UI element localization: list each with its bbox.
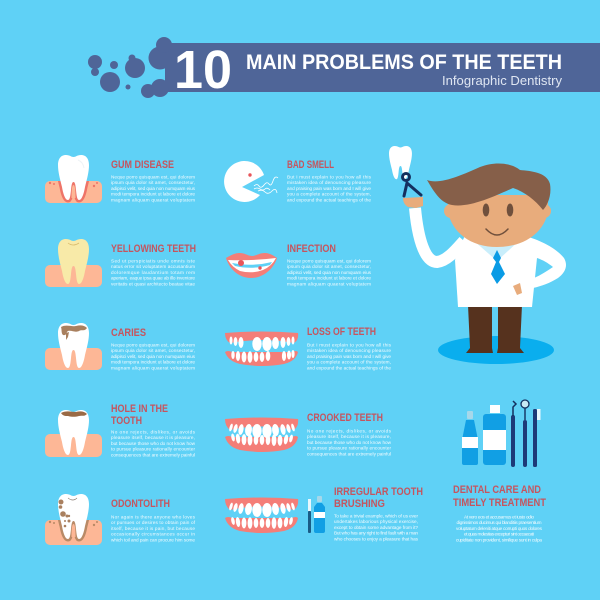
icon: toothbrush and paste <box>308 496 325 533</box>
icon: lips with infected teeth <box>226 253 277 278</box>
icon: tooth with inflamed gum <box>45 155 102 203</box>
text block: Sed ut perspiciatis unde omnis iste <box>111 258 195 264</box>
text block: which toil and pain can procure him some <box>111 537 195 542</box>
heading: GUM DISEASE <box>111 159 174 171</box>
text block: At vero eos et accusamus et iusto odio <box>464 514 534 520</box>
text block: you a complete account of the system, <box>307 360 391 365</box>
heading line 2: TIMELY TREATMENT <box>453 497 546 509</box>
right arm <box>520 236 566 292</box>
left arm <box>415 208 464 262</box>
text block: magnam aliquam quaerat voluptatem <box>111 365 195 370</box>
text block: dignissimos ducimus qui blanditiis praesentium <box>456 520 542 525</box>
text block: except to obtain some advantage from it? <box>334 525 418 530</box>
hand at hip <box>513 283 522 295</box>
text block: ipsum quia dolor sit amet, consectetur, <box>287 264 371 269</box>
panel: loss of teeth <box>225 326 392 370</box>
text block: No one rejects, dislikes, or avoids <box>307 428 392 434</box>
panel: yellowing teeth <box>45 239 196 287</box>
icon: toothpaste tube <box>462 411 478 465</box>
icon: yellow tooth <box>45 239 102 287</box>
text block: but because those who do not know how <box>307 440 392 445</box>
text block: ipsum quia dolor sit amet, consectetur, <box>111 348 195 353</box>
panel: gum disease <box>45 155 196 203</box>
collar <box>473 240 520 261</box>
text block: To take a trivial example, which of us ever <box>334 514 418 518</box>
text block: but because those who do not know how <box>111 441 196 446</box>
icon: dental mirror <box>521 400 529 467</box>
floor shadow <box>438 336 554 364</box>
text block <box>307 342 392 370</box>
heading: INFECTION <box>287 243 336 255</box>
text block: mistaken idea of denouncing pleasure <box>307 348 391 353</box>
panel: caries <box>45 323 196 370</box>
text block: itself, because it is pain, but because <box>111 526 195 531</box>
icon: dentures with crooked teeth <box>225 418 298 452</box>
hair <box>427 163 550 210</box>
heading: ODONTOLITH <box>111 498 170 510</box>
text block <box>111 514 196 542</box>
text block: But I must explain to you how all this <box>287 174 372 180</box>
icon: mouth with bad breath <box>224 161 278 202</box>
text block: mistaken idea of denouncing pleasure <box>287 180 371 185</box>
heading: LOSS OF TEETH <box>307 326 376 338</box>
text block: consequences that are extremely painful <box>111 452 195 457</box>
text block: who chooses to enjoy a pleasure that has <box>334 536 419 541</box>
tie <box>491 250 505 284</box>
extracted tooth <box>389 146 412 179</box>
text block: to pursue pleasure rationally encounter <box>307 446 391 451</box>
text block: you a complete account of the system, <box>287 192 371 197</box>
panel: bad smell <box>224 159 372 202</box>
text block: But who has any right to find fault with a man <box>334 531 418 536</box>
panel: irregular tooth brushing <box>225 486 423 541</box>
panel: odontolith <box>45 494 196 545</box>
text block: Neque porro quisquam est, qui dolorem <box>287 258 371 264</box>
text block: to pursue pleasure rationally encounter <box>111 447 195 452</box>
heading: YELLOWING TEETH <box>111 243 196 255</box>
panel: crooked teeth <box>225 412 392 456</box>
text block: Neque porro quisquam est, qui dolorem <box>111 174 195 180</box>
trousers <box>466 305 524 353</box>
smile <box>486 229 508 235</box>
raised hand <box>403 197 423 208</box>
lab coat <box>455 235 537 307</box>
title: MAIN PROBLEMS OF THE TEETH <box>246 51 562 74</box>
title number: 10 <box>174 40 232 100</box>
heading: BAD SMELL <box>287 159 334 171</box>
heading: CROOKED TEETH <box>307 412 383 424</box>
text block: pleasure itself, because it is pleasure, <box>111 435 195 440</box>
text block: adipisci velit, sed quia non numquam eius <box>111 186 196 191</box>
text block <box>111 430 196 457</box>
text block: Nor again is there anyone who loves <box>111 514 196 520</box>
heading: CARIES <box>111 327 146 339</box>
text block: veritatis et quasi architecto beatae vitae <box>111 281 195 286</box>
text block <box>111 342 196 370</box>
header banner <box>88 37 600 100</box>
icon: tooth with caries <box>45 323 102 370</box>
icon: dental probe <box>511 401 516 467</box>
icon: mouthwash bottle <box>483 405 506 465</box>
text block: aperiam, eaque ipsa quae ab illo inventore <box>111 276 195 281</box>
subtitle: Infographic Dentistry <box>442 73 562 88</box>
text block: Neque porro quisquam est, qui dolorem <box>111 342 195 348</box>
text block: adipisci velit, sed quia non numquam eius <box>287 270 372 275</box>
text block: cupiditate non provident, similique sunt in culpa <box>456 537 542 542</box>
icon: toothbrush <box>533 409 540 467</box>
text block: voluptatum deleniti atque corrupti quos dolores <box>456 526 543 531</box>
text block <box>111 258 195 286</box>
text block: ipsum quia dolor sit amet, consectetur, <box>111 180 195 185</box>
text block: et quas molestias excepturi sint occaecati <box>464 532 534 537</box>
heading: IRREGULAR TOOTH <box>334 486 423 498</box>
text block: and expound the actual teachings of the <box>307 365 391 370</box>
icon: dentures with missing teeth <box>225 332 298 366</box>
text block: No one rejects, dislikes, or avoids <box>111 430 196 434</box>
text block: doloremque laudantium totam rem <box>111 270 195 275</box>
icon: tooth with tartar <box>45 494 102 545</box>
panel: hole in the tooth <box>45 403 196 457</box>
text block <box>456 514 543 542</box>
text block: and praising pain was born and I will give <box>287 186 371 191</box>
text block <box>334 514 419 541</box>
text block: undertakes laborious physical exercise, <box>334 519 418 524</box>
forceps <box>402 174 421 196</box>
text block: and praising pain was born and I will give <box>307 354 391 359</box>
heading: HOLE IN THE <box>111 403 168 415</box>
text block <box>287 174 372 202</box>
panel: infection <box>226 243 372 286</box>
heading line 2: BRUSHING <box>334 498 385 510</box>
text block: or pursues or desires to obtain pain of <box>111 520 196 525</box>
illustration: dentist holding tooth <box>389 146 566 364</box>
icon: tooth with hole <box>45 410 102 457</box>
text block: pleasure itself, because it is pleasure, <box>307 434 391 439</box>
text block: and expound the actual teachings of the <box>287 197 371 202</box>
panel: dental care and timely treatment <box>453 400 546 542</box>
text block: occasionally circumstances occur in <box>111 532 195 537</box>
heading: DENTAL CARE AND <box>453 484 541 496</box>
text block: magnam aliquam quaerat voluptatem <box>287 281 371 286</box>
text block <box>307 428 392 456</box>
text block: modi tempora incidunt ut labore et dolore <box>111 360 195 365</box>
heading line 2: TOOTH <box>111 415 142 427</box>
decorative bubbles <box>88 37 172 98</box>
text block: consequences that are extremely painful <box>307 451 391 456</box>
text block: natus error sit voluptatem accusantium <box>111 264 195 269</box>
text block <box>111 174 196 202</box>
text block <box>287 258 372 286</box>
text block: adipisci velit, sed quia non numquam eius <box>111 354 196 359</box>
text block: modi tempora incidunt ut labore et dolore <box>111 192 195 197</box>
text block: modi tempora incidunt ut labore et dolore <box>287 276 371 281</box>
text block: But I must explain to you how all this <box>307 342 392 348</box>
icon: healthy dentures <box>225 498 298 533</box>
text block: magnam aliquam quaerat voluptatem <box>111 197 195 202</box>
eyes <box>483 204 513 216</box>
ears and head <box>444 195 551 247</box>
